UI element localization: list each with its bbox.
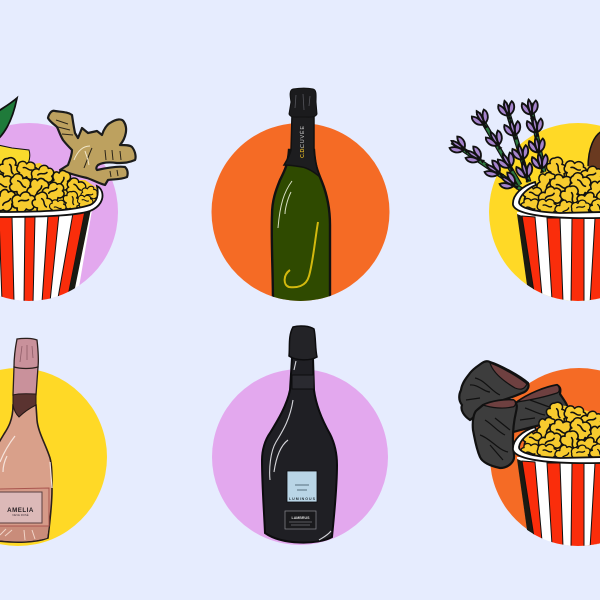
bottle body — [0, 405, 52, 542]
icon: brown almond — [588, 130, 600, 170]
orange circle — [212, 123, 390, 301]
bottle label: AMELIA — [7, 507, 34, 514]
cap — [289, 326, 317, 360]
icon: lavender sprigs — [447, 98, 550, 194]
blue label: LUMINOUS — [289, 497, 316, 501]
neck label text: CUVÉE — [299, 126, 306, 148]
pink circle — [212, 369, 388, 545]
bottle label — [0, 488, 49, 526]
popcorn bucket — [0, 186, 102, 305]
dark lower label — [285, 511, 316, 529]
icon: green leaf — [0, 98, 17, 140]
panel: black sparkling bottle — [212, 326, 388, 545]
icon: dried prunes — [459, 361, 568, 468]
glass highlights — [278, 181, 292, 228]
bottle body — [272, 150, 330, 305]
popcorn — [0, 155, 100, 218]
pink circle — [0, 123, 118, 301]
bottle label: NEVE ROSÉ — [12, 512, 29, 517]
popcorn — [519, 155, 600, 222]
base highlights — [0, 529, 35, 540]
bottle base — [0, 525, 49, 541]
yellow circle — [0, 368, 107, 546]
panel: rose sparkling bottle — [0, 338, 107, 546]
glass highlights — [0, 436, 52, 488]
panel: green sparkling bottle — [212, 88, 390, 305]
bottle — [0, 338, 52, 542]
popcorn bucket — [513, 182, 600, 305]
icon: ginger root — [48, 111, 136, 185]
glass highlights — [270, 361, 331, 540]
panel: ginger popcorn — [0, 98, 136, 305]
icon: lemon wedge — [0, 145, 30, 172]
orange circle — [490, 368, 600, 546]
neck label text: C.D. — [300, 147, 306, 158]
foil neck — [284, 115, 320, 177]
cap — [14, 338, 38, 368]
foil neck — [13, 367, 38, 395]
yellow circle — [489, 123, 600, 301]
neck band — [292, 375, 314, 389]
brown collar — [13, 394, 36, 417]
bottle body — [262, 358, 337, 543]
dark lower label: LAMBRUS — [292, 516, 310, 520]
neck label text — [299, 126, 304, 158]
gold script J — [285, 222, 318, 287]
cap — [289, 88, 317, 117]
panel: lavender popcorn — [447, 98, 600, 305]
popcorn — [519, 400, 600, 467]
panel: prune popcorn — [459, 361, 600, 550]
popcorn bucket — [513, 427, 600, 550]
bottle — [262, 326, 337, 543]
bottle — [272, 88, 330, 305]
blue label — [287, 471, 317, 502]
